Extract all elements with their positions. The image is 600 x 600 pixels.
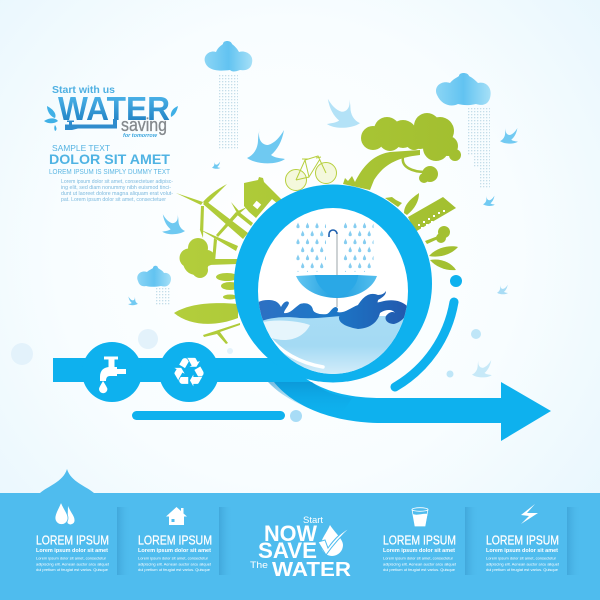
pale decorative bubbles [11, 329, 233, 365]
column: water [36, 502, 110, 572]
column: water: Lorem ipsum dolor sit amet, consectetur [36, 556, 107, 560]
column: energy: adipiscing elit. Aenean auctor arcu aliquet [486, 562, 560, 566]
icon: tap circle [82, 342, 142, 402]
icon: glass [412, 508, 428, 526]
ball: inner white circle with umbrella and water [258, 208, 408, 374]
pale water sheen [263, 320, 310, 340]
icon: lightning bolt [521, 504, 538, 524]
slogan: now save the water: WATER [272, 559, 352, 581]
label: sample text: SAMPLE TEXT [52, 143, 110, 153]
rain right [342, 222, 374, 272]
column: home: Lorem ipsum dolor sit amet [138, 548, 211, 554]
icon: water splashes [44, 106, 178, 131]
slogan: now save the water: NOW [264, 521, 317, 546]
icon: recycle circle [159, 342, 219, 402]
column: energy: LOREM IPSUM [486, 534, 559, 548]
bar: lower short line [132, 411, 285, 420]
waves [249, 291, 410, 329]
arrow: swoop from bar to arrowhead [262, 358, 551, 441]
column: home: LOREM IPSUM [138, 534, 212, 548]
sample text block [49, 143, 173, 203]
water body [262, 316, 404, 374]
dots: pale [446, 329, 481, 378]
bar: horizontal band [53, 358, 293, 382]
body text: pat. Lorem ipsum dolor sit amet, consectetuer [61, 197, 166, 203]
column: energy: Lorem ipsum dolor sit amet [486, 548, 558, 554]
column: glass: Lorem ipsum dolor sit amet [383, 548, 455, 554]
cloud: top with rain [205, 41, 252, 150]
arc: outer ring segment [395, 302, 454, 387]
column: glass: dui pretium ut feugiat est varius. Quisque [383, 568, 455, 572]
rain left [295, 222, 326, 272]
water highlights [267, 335, 323, 367]
windmills [176, 184, 253, 262]
bottom panel [0, 469, 600, 600]
column: glass [383, 508, 457, 572]
cloud: right with rain [436, 73, 491, 188]
column: energy: dui pretium ut feugiat est varius. Quisque [486, 568, 558, 572]
tree: large [343, 113, 461, 207]
column: home: Lorem ipsum dolor sit amet, consectetur [138, 556, 209, 560]
column: energy [486, 504, 560, 572]
cloud: small left with rain [137, 266, 171, 305]
column: energy: Lorem ipsum dolor sit amet, consectetur [486, 556, 557, 560]
column: home: adipiscing elit. Aenean auctor arcu aliquet [138, 562, 212, 566]
column: water: dui pretium ut feugiat est varius. Quisque [36, 568, 108, 572]
dot: pale [290, 410, 302, 422]
column: water: Lorem ipsum dolor sit amet [36, 548, 108, 554]
tagline: for tomorrow: for tomorrow [123, 133, 158, 139]
slogan: now save the water: The [250, 560, 268, 571]
green world illustration [174, 113, 461, 344]
umbrella shaft [329, 230, 337, 307]
tree: left [180, 238, 238, 278]
icon: drops [68, 506, 75, 524]
column: home: dui pretium ut feugiat est varius. Quisque [138, 568, 210, 572]
icon: pipe and tap [65, 119, 117, 130]
birds [128, 97, 518, 377]
shade under ring [268, 382, 352, 417]
subheading: LOREM IPSUM IS SIMPLY DUMMY TEXT [49, 167, 170, 176]
icon: house [166, 507, 187, 525]
slogan: now save the water: Start [303, 515, 323, 526]
umbrella canopy [296, 275, 377, 298]
heading: dolor sit amet: DOLOR SIT AMET [49, 151, 170, 167]
body text [61, 179, 173, 203]
ring: large circle [234, 184, 432, 382]
body text: ing elit, sed diam nonummy nibh euismod tinci- [61, 185, 171, 191]
icon: recycle circle: ♻ [171, 350, 207, 396]
column: glass: adipiscing elit. Aenean auctor arcu aliquet [383, 562, 457, 566]
dot: blue [450, 275, 462, 287]
house [244, 177, 283, 218]
leaves: left cluster [174, 273, 240, 344]
column: glass: LOREM IPSUM [383, 534, 456, 548]
icon: drop with check mark [321, 525, 343, 556]
column: water: adipiscing elit. Aenean auctor arcu aliquet [36, 562, 110, 566]
title block [44, 84, 178, 139]
heading: saving: saving [121, 115, 167, 135]
icon: bicycle [286, 156, 336, 190]
heading: start with us: Start with us [52, 84, 115, 96]
slogan: now save the water [250, 515, 352, 581]
body text: Lorem ipsum dolor sit amet, consectetuer adipisc- [61, 179, 173, 185]
body text: dunt ut laoreet dolore magna aliquam erat volut- [61, 191, 173, 197]
column: home [138, 507, 212, 572]
leaves and building: right cluster [404, 193, 458, 270]
slogan: now save the water: SAVE [258, 538, 317, 563]
heading: water: WATER [58, 90, 170, 127]
column: water: LOREM IPSUM [36, 534, 109, 548]
column: glass: Lorem ipsum dolor sit amet, consectetur [383, 556, 454, 560]
